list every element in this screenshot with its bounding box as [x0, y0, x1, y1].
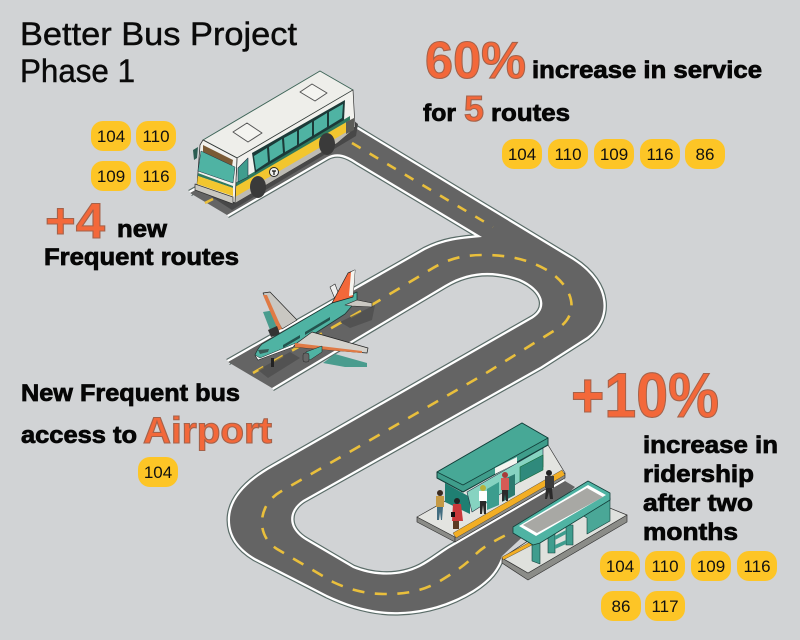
callout: service increase: for: [423, 100, 456, 127]
icon: bus: [193, 71, 358, 210]
road: [190, 118, 603, 612]
route pills: service: [502, 139, 725, 169]
callout: service increase: increase in service: [532, 57, 762, 84]
person 1: [436, 490, 444, 520]
callout: ridership: increase in: [643, 432, 778, 459]
callout: service increase: routes: [491, 100, 570, 127]
callout: airport access: New Frequent bus: [21, 380, 240, 407]
person 5: [545, 470, 554, 499]
route pills: ridership: 110: [651, 557, 679, 576]
route pills: ridership: 86: [612, 597, 630, 616]
callout: new frequent routes: [44, 193, 239, 271]
stabilizer: [345, 300, 372, 307]
callout: ridership: months: [643, 519, 738, 546]
route pills: new frequent: 104: [97, 127, 125, 146]
callout: ridership: [571, 361, 778, 546]
title: Phase 1: [20, 53, 135, 89]
route pills: service: 109: [600, 145, 628, 164]
yellow strip: [453, 470, 565, 538]
second platform: [502, 515, 627, 580]
lane markings: [205, 143, 572, 594]
icon: airplane: [255, 270, 375, 378]
roof: [203, 71, 353, 158]
icon: station platform and shelter: [417, 423, 627, 580]
route pills: service: 110: [554, 145, 582, 164]
route pills: new frequent: 116: [142, 167, 170, 186]
route pill: airport: [138, 457, 178, 487]
callout: ridership: after two: [643, 490, 753, 517]
route pills: new frequent: 110: [142, 127, 170, 146]
route pills: service: 86: [696, 145, 714, 164]
route pills: service: 104: [508, 145, 536, 164]
tail fin: [332, 270, 355, 303]
callout: service increase: 60%: [425, 32, 526, 90]
building roof: [437, 423, 548, 492]
far wing: [263, 292, 297, 329]
person 4: [501, 472, 509, 501]
building walls: [445, 483, 470, 514]
callout: new frequent routes: +4: [45, 193, 105, 249]
bus front: [197, 140, 237, 203]
route pills: ridership: 109: [697, 557, 725, 576]
route pills: ridership: 116: [743, 557, 771, 576]
route pills: new frequent: 109: [97, 167, 125, 186]
route pills: service: 116: [646, 145, 674, 164]
callout: airport access: Airport: [143, 410, 272, 451]
near wing: [295, 332, 368, 353]
end wall: [582, 498, 610, 534]
callout: new frequent routes: new: [117, 216, 167, 243]
title: Better Bus Project: [20, 16, 297, 52]
person 2: [451, 498, 463, 529]
route pill: airport: 104: [144, 463, 172, 482]
callout: airport access: access to: [21, 422, 137, 449]
route pills: new frequent: [91, 121, 176, 191]
route pills: ridership: 104: [606, 557, 634, 576]
platform top: [417, 445, 565, 537]
fuselage: [255, 292, 357, 360]
person 3: [479, 485, 487, 514]
bus side: [235, 90, 355, 203]
title: [20, 16, 297, 89]
callout: ridership: ridership: [643, 461, 754, 488]
callout: ridership: +10%: [571, 361, 719, 431]
callout: new frequent routes: Frequent routes: [44, 244, 239, 271]
small fin: [330, 284, 339, 299]
columns: [532, 540, 540, 564]
platform side: [417, 517, 455, 542]
route pills: ridership: [600, 551, 777, 621]
shelter roof: [513, 481, 610, 545]
plane shadows: [263, 310, 282, 330]
route pills: ridership: 117: [651, 597, 679, 616]
callout: airport access: [21, 380, 272, 451]
callout: service increase: 5: [464, 88, 484, 129]
callout: service increase: [423, 32, 762, 129]
